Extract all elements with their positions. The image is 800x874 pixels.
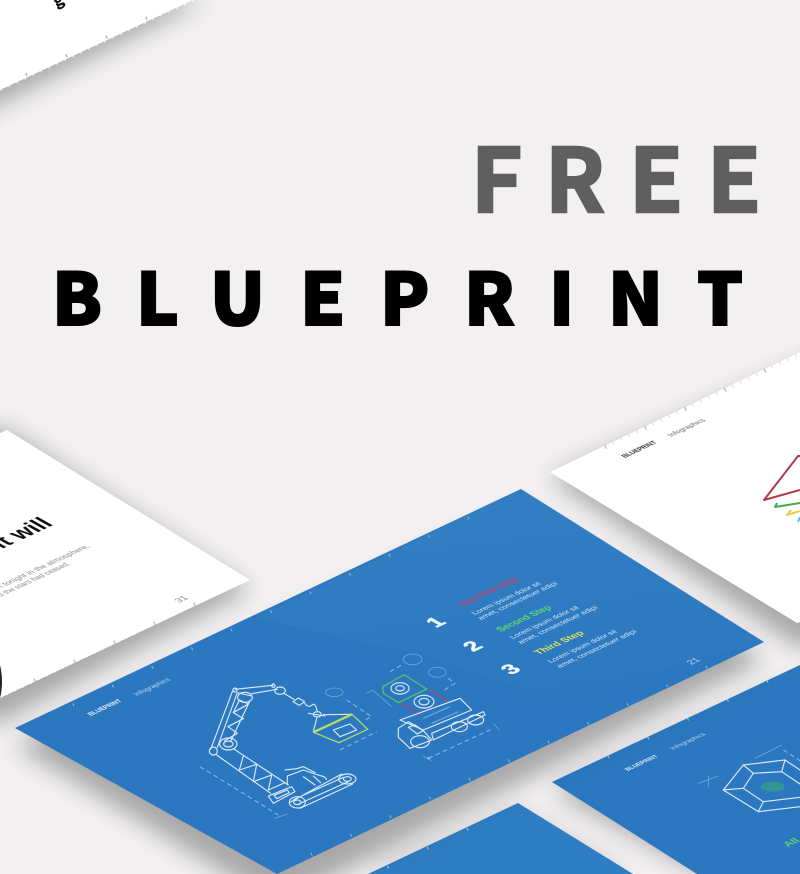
step three body: Lorem ipsum dolor sit: [545, 628, 620, 664]
slide: top-left white: [0, 0, 205, 124]
number 2: 2: [458, 638, 488, 654]
sheen: [257, 489, 764, 700]
number 1: 1: [421, 614, 451, 630]
header sublabel: Infographics: [669, 732, 709, 751]
step one body line two: amet, consectetuer adipi: [475, 580, 560, 621]
header sublabel: Infographics: [666, 418, 708, 438]
slide: left white: [0, 430, 250, 722]
chart: stacked triangle: [764, 456, 800, 522]
step three heading: Third Step: [531, 629, 587, 656]
slide: bottom-right blue: [552, 665, 800, 874]
step two body: Lorem ipsum dolor sit: [507, 604, 582, 640]
title: FREE: FREE: [471, 111, 761, 238]
step two heading: Second Step: [493, 604, 555, 633]
icon: hexagon: [698, 745, 800, 812]
header label: BLUEPRINT: [620, 440, 660, 459]
illustration: crane: [200, 684, 377, 818]
slide: main blue: [15, 489, 764, 874]
page number 21: 21: [684, 657, 704, 666]
step two body line two: amet, consectetuer adipi: [515, 604, 600, 645]
numbered steps: [421, 576, 639, 677]
title: BLUEPRINT: BLUEPRINT: [52, 241, 743, 346]
slide: bottom centre blue: [368, 803, 633, 874]
slide: right white: [550, 352, 800, 650]
page number 31: 31: [172, 595, 192, 604]
step three body line two: amet, consectetuer adipi: [554, 628, 639, 669]
header label: BLUEPRINT: [86, 698, 125, 717]
step one body: Lorem ipsum dolor sit: [469, 580, 544, 616]
illustration: truck: [367, 654, 499, 761]
header label: BLUEPRINT: [624, 754, 661, 772]
number 3: 3: [496, 661, 526, 677]
step one heading: Your First Step: [454, 576, 522, 608]
header sublabel: Infographics: [132, 677, 173, 697]
dark circle edge: [0, 665, 2, 698]
